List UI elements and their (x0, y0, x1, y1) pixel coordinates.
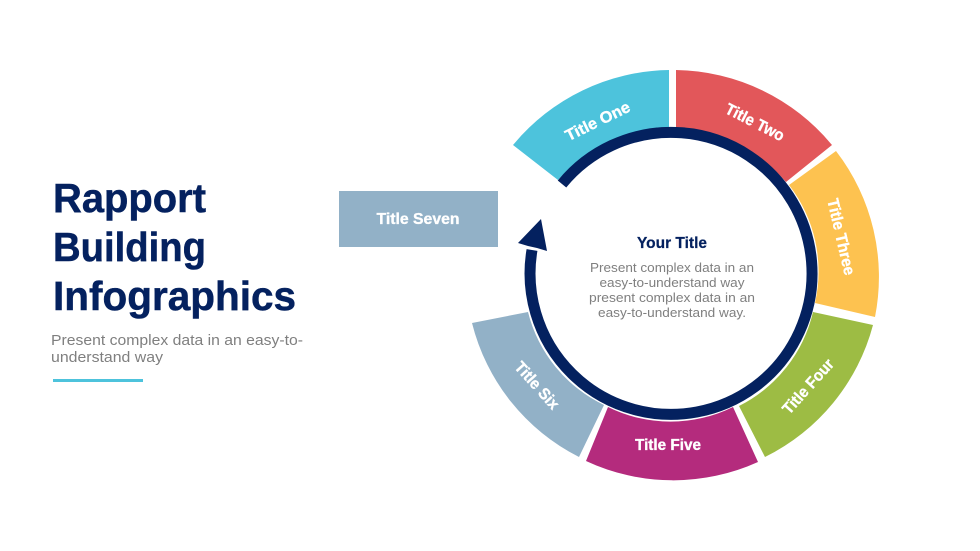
subtitle: understand way (51, 349, 164, 366)
subtitle: Present complex data in an easy-to- (51, 332, 303, 349)
segment: title five: Title Five (635, 437, 701, 454)
center text: description: easy-to-understand way. (598, 305, 746, 320)
segment: title four (739, 312, 873, 457)
segment: title two (676, 70, 832, 182)
segment: title one (513, 70, 669, 180)
title: Infographics (53, 273, 296, 319)
segment: title six (472, 312, 604, 457)
segment: title three: Title Three (823, 197, 857, 277)
title: Rapport (53, 175, 206, 221)
center text: description: present complex data in an (589, 290, 755, 305)
accent line (53, 379, 143, 382)
segment: title five (586, 407, 758, 480)
segment: title three (789, 151, 879, 317)
panel: title seven: Title Seven (376, 211, 460, 228)
segment: title one: Title One (563, 99, 633, 145)
segment: title two: Title Two (722, 101, 787, 145)
center text: description (589, 260, 755, 320)
subtitle (51, 332, 303, 366)
circular arrow (518, 132, 812, 414)
center text: description: Present complex data in an (590, 260, 754, 275)
segment: title four: Title Four (780, 356, 838, 418)
center text: description: easy-to-understand way (600, 275, 745, 290)
segment: title six: Title Six (511, 359, 562, 413)
panel: title seven (339, 191, 498, 247)
center text: your title: Your Title (637, 235, 707, 252)
title: Building (53, 224, 206, 270)
title (53, 175, 296, 319)
